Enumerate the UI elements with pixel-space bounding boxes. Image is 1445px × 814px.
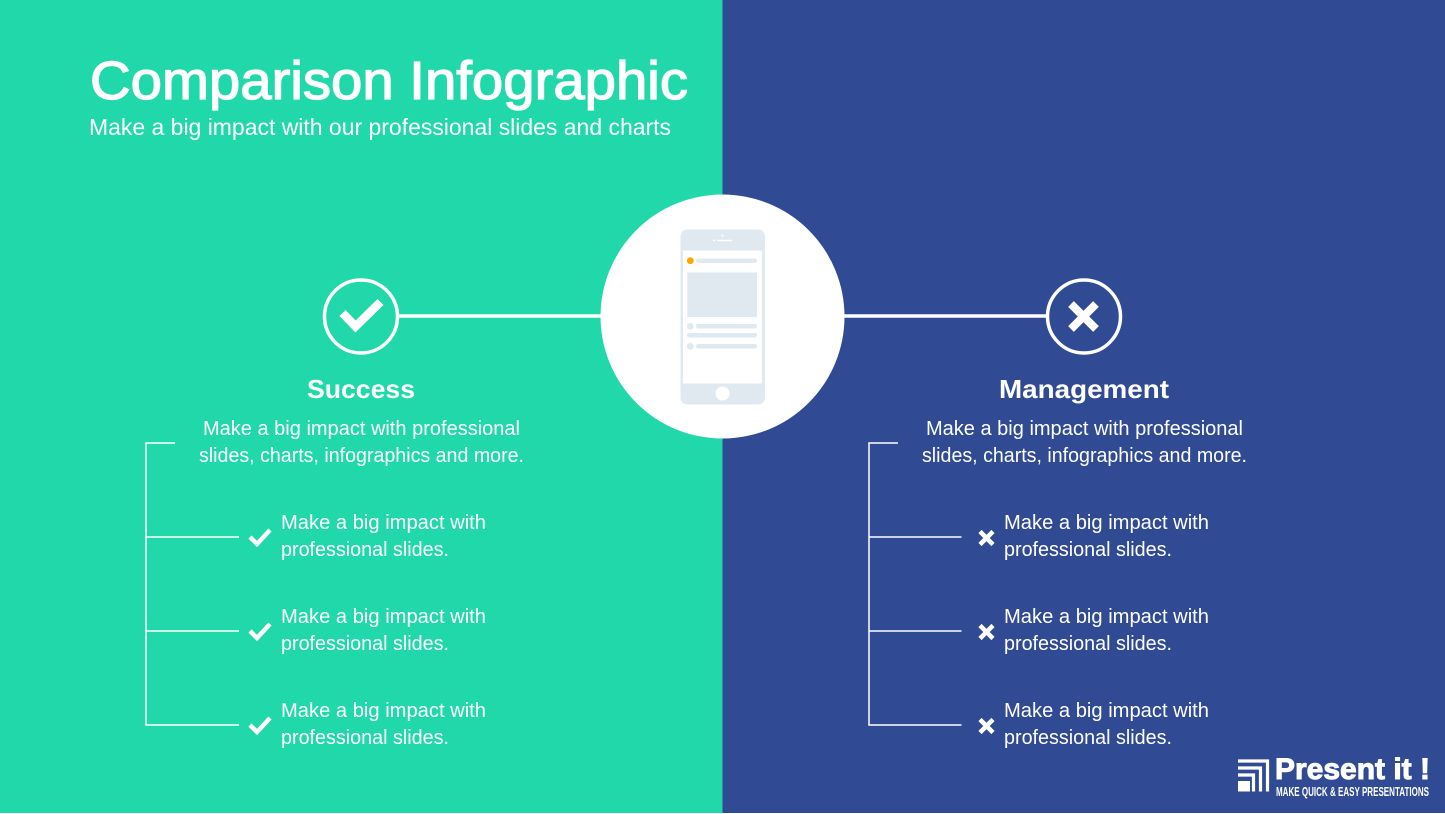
list item: management 3: Make a big impact with bbox=[1004, 700, 1209, 722]
text block: management description bbox=[922, 418, 1247, 467]
icon: management cross circle bbox=[1048, 280, 1120, 353]
panel: right blue background bbox=[722, 0, 1445, 813]
list item: success 2: professional slides. bbox=[281, 633, 449, 655]
list item: success 3: Make a big impact with bbox=[281, 700, 486, 722]
panel: left green background bbox=[0, 0, 722, 813]
subtitle: Make a big impact with our professional slides and charts bbox=[89, 114, 671, 140]
heading: Management: Management bbox=[999, 374, 1169, 404]
list item: management 2 bbox=[980, 606, 1209, 655]
connector line: right bbox=[843, 314, 1047, 318]
list item: success 1: Make a big impact with bbox=[281, 512, 486, 534]
list item: success 1: professional slides. bbox=[281, 539, 449, 561]
connector line: left bbox=[398, 314, 602, 318]
list item: management 3 bbox=[980, 700, 1209, 749]
logo wordmark: Present it ! bbox=[1275, 753, 1430, 786]
list item: success 3 bbox=[250, 700, 486, 749]
bracket: success list bbox=[146, 443, 239, 725]
list item: management 2: Make a big impact with bbox=[1004, 606, 1209, 628]
icon: logo mark bbox=[1238, 761, 1268, 792]
text block: success description: Make a big impact with professional bbox=[203, 418, 520, 440]
icon: smartphone bbox=[680, 230, 765, 404]
list item: management 1: Make a big impact with bbox=[1004, 512, 1209, 534]
text block: success description bbox=[199, 418, 524, 467]
list item: management 3: professional slides. bbox=[1004, 727, 1172, 749]
text block: management description: Make a big impact with professional bbox=[926, 418, 1243, 440]
list item: success 1 bbox=[250, 512, 486, 561]
list item: management 1: professional slides. bbox=[1004, 539, 1172, 561]
heading: Success: Success bbox=[307, 374, 415, 404]
list item: management 1 bbox=[980, 512, 1209, 561]
logo: Present it bbox=[1238, 753, 1430, 799]
central circle with phone icon bbox=[600, 194, 844, 438]
title: Comparison Infographic bbox=[90, 51, 688, 111]
bracket: management list bbox=[869, 443, 962, 725]
list item: success 2 bbox=[250, 606, 486, 655]
icon: success check circle bbox=[324, 280, 398, 353]
text block: management description: slides, charts, infographics and more. bbox=[922, 445, 1247, 467]
list item: success 3: professional slides. bbox=[281, 727, 449, 749]
list item: success 2: Make a big impact with bbox=[281, 606, 486, 628]
text block: success description: slides, charts, infographics and more. bbox=[199, 445, 524, 467]
list item: management 2: professional slides. bbox=[1004, 633, 1172, 655]
